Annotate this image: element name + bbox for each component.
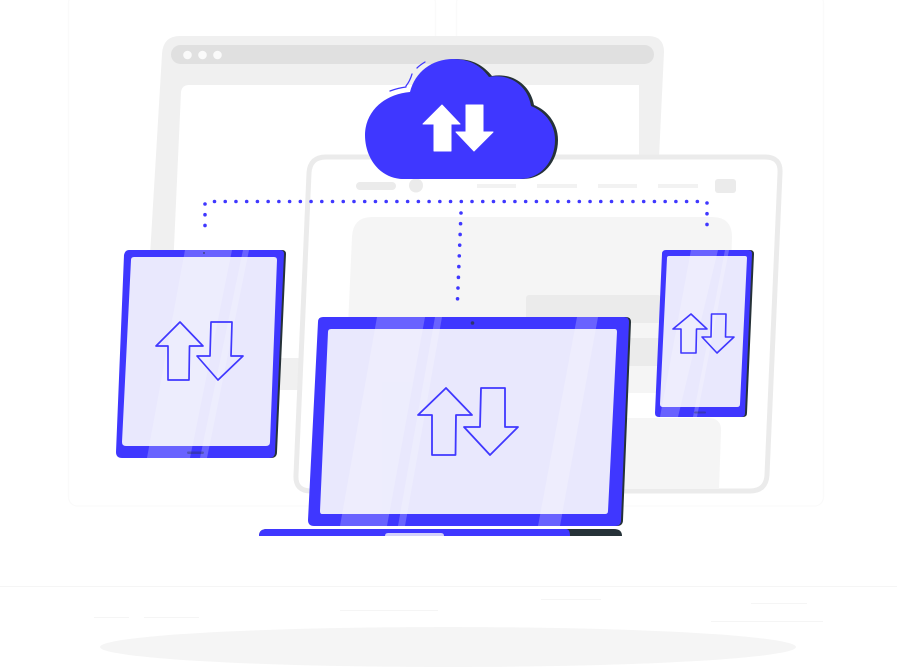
hero content block xyxy=(345,217,732,393)
ground line and specks xyxy=(0,586,897,622)
phone reflections xyxy=(660,250,729,417)
dotted connectors xyxy=(205,202,707,300)
phone shadow xyxy=(660,250,754,417)
laptop trackpad notch xyxy=(385,533,444,536)
laptop reflections xyxy=(340,317,598,526)
laptop screen xyxy=(320,329,617,514)
cloud arrows xyxy=(423,105,493,151)
laptop xyxy=(259,317,631,536)
content bars xyxy=(526,295,661,366)
browser page area xyxy=(169,85,639,358)
back browser window xyxy=(142,36,664,390)
cloud shadow xyxy=(368,59,558,179)
tablet camera and home button xyxy=(203,252,205,254)
phone screen xyxy=(660,256,747,407)
browser window dots xyxy=(183,51,222,59)
cloud body xyxy=(365,59,555,179)
front browser window xyxy=(296,157,780,491)
laptop sync arrows xyxy=(418,388,518,455)
laptop lid shadow xyxy=(316,317,631,526)
tablet sync arrows xyxy=(156,322,243,380)
floor shadow xyxy=(100,627,796,667)
phone home button xyxy=(694,412,706,414)
tablet reflections xyxy=(147,250,249,458)
cloud outline dashes xyxy=(390,62,425,91)
tablet body xyxy=(116,250,284,458)
phone xyxy=(655,250,754,417)
browser title bar xyxy=(171,45,654,64)
tablet screen xyxy=(122,257,277,446)
laptop base xyxy=(259,529,622,536)
cloud xyxy=(365,59,558,179)
phone sync arrows xyxy=(673,314,734,353)
background panels xyxy=(68,0,824,506)
navigation bar xyxy=(356,178,736,193)
tablet xyxy=(116,250,286,458)
phone body xyxy=(655,250,752,417)
lower content block xyxy=(500,418,721,489)
laptop camera xyxy=(471,321,474,325)
laptop lid xyxy=(308,317,629,526)
tablet shadow xyxy=(122,250,286,458)
